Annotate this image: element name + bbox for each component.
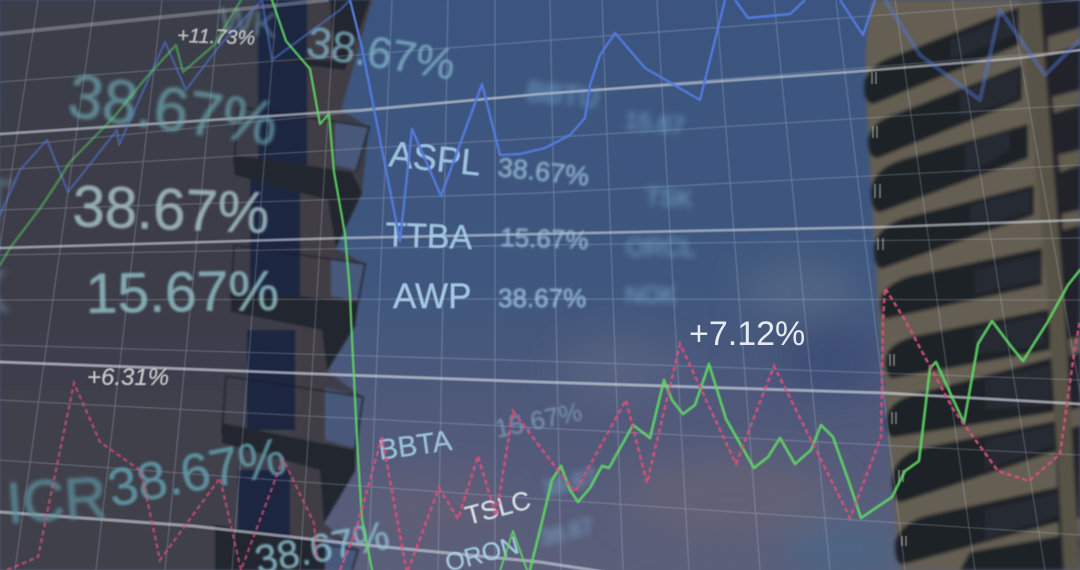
label: ASPL: ASPL bbox=[387, 133, 483, 184]
column bbox=[1019, 0, 1080, 570]
faded column: TSK bbox=[645, 183, 693, 213]
callout: +7.12%: +7.12% bbox=[689, 315, 805, 353]
dark balcony rings bbox=[864, 7, 1070, 570]
percent change callouts bbox=[87, 25, 805, 391]
value: left 38.67% middle: 38.67% bbox=[72, 174, 270, 246]
faded column: BBTU bbox=[525, 76, 600, 113]
value: left 38.67% upper: 38.67% bbox=[64, 62, 282, 159]
value: lower left 38.67%: 38.67% bbox=[103, 427, 291, 519]
left building bbox=[0, 0, 372, 570]
balcony rails bbox=[217, 107, 369, 570]
ticker labels and values bbox=[0, 0, 696, 570]
right building bbox=[864, 0, 1080, 570]
value: AWP: 38.67% bbox=[498, 283, 586, 313]
label: ICR fragment: ICR bbox=[4, 465, 109, 536]
right bay floor bands bbox=[1048, 28, 1080, 538]
label: top fragment: WK bbox=[217, 0, 279, 46]
value: left 15.67%: 15.67% bbox=[85, 259, 280, 326]
faded column: ORCL bbox=[626, 234, 696, 262]
window panes bbox=[950, 14, 1060, 540]
value: BBTA: 15.67% bbox=[492, 396, 585, 444]
tip highlights bbox=[872, 72, 906, 546]
value: top 38.67%: 38.67% bbox=[303, 17, 458, 89]
label: BBTA: BBTA bbox=[377, 425, 454, 467]
label: AWP: AWP bbox=[393, 277, 471, 316]
blue line chart bbox=[0, 0, 1080, 241]
faded column bbox=[525, 76, 696, 551]
label: TSLC: TSLC bbox=[462, 485, 534, 531]
faded column: 38.67 bbox=[537, 512, 596, 551]
value: TTBA: 15.67% bbox=[500, 222, 589, 255]
callout: +11.73%: +11.73% bbox=[177, 25, 256, 50]
window column bbox=[238, 0, 307, 570]
callout: +6.31%: +6.31% bbox=[87, 364, 169, 391]
label: TTBA: TTBA bbox=[385, 216, 473, 257]
balcony floors bbox=[215, 0, 370, 570]
right-of-column bays bbox=[1040, 0, 1080, 570]
pink dashed line chart bbox=[7, 288, 1080, 570]
faded column: 15.67 bbox=[623, 107, 686, 140]
faded column: 38.67 bbox=[540, 463, 599, 502]
value: ASPL: 38.67% bbox=[496, 152, 591, 192]
balcony openings bbox=[325, 122, 369, 570]
faded column: NOK bbox=[625, 282, 677, 309]
building side wall bbox=[290, 0, 372, 570]
